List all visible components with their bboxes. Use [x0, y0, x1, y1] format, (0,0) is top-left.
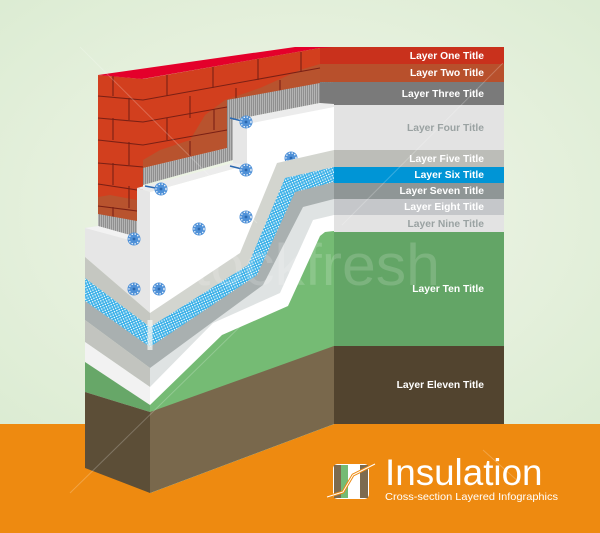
render layers, left face: [85, 257, 150, 493]
brick wall: [98, 47, 334, 222]
layer labels: Layer Eleven Title: [397, 380, 484, 391]
layer labels: Layer Three Title: [402, 89, 484, 100]
ground: [0, 424, 600, 533]
layer labels: Layer One Title: [410, 51, 484, 62]
layer labels: [397, 51, 484, 391]
logo title: Insulation: [385, 452, 543, 493]
layer labels: Layer Eight Title: [404, 202, 484, 213]
layer labels: Layer Five Title: [409, 154, 484, 165]
base mesh layer: [98, 82, 334, 240]
layer labels: Layer Seven Title: [399, 186, 484, 197]
logo icon: [327, 464, 375, 498]
layer labels: Layer Six Title: [414, 170, 484, 181]
render layers, right face: [150, 150, 334, 493]
watermark: stockfresh: [163, 233, 440, 298]
layer labels: Layer Four Title: [407, 123, 484, 134]
logo subtitle: Cross-section Layered Infographics: [385, 491, 558, 503]
layer labels: Layer Ten Title: [412, 284, 484, 295]
background: [0, 0, 600, 424]
legend strip: layer bands: [320, 47, 504, 424]
insulation board: [85, 103, 334, 424]
layer labels: Layer Two Title: [410, 68, 484, 79]
anchors: [128, 116, 298, 296]
corner bead: [148, 320, 152, 350]
layer labels: Layer Nine Title: [408, 219, 484, 230]
